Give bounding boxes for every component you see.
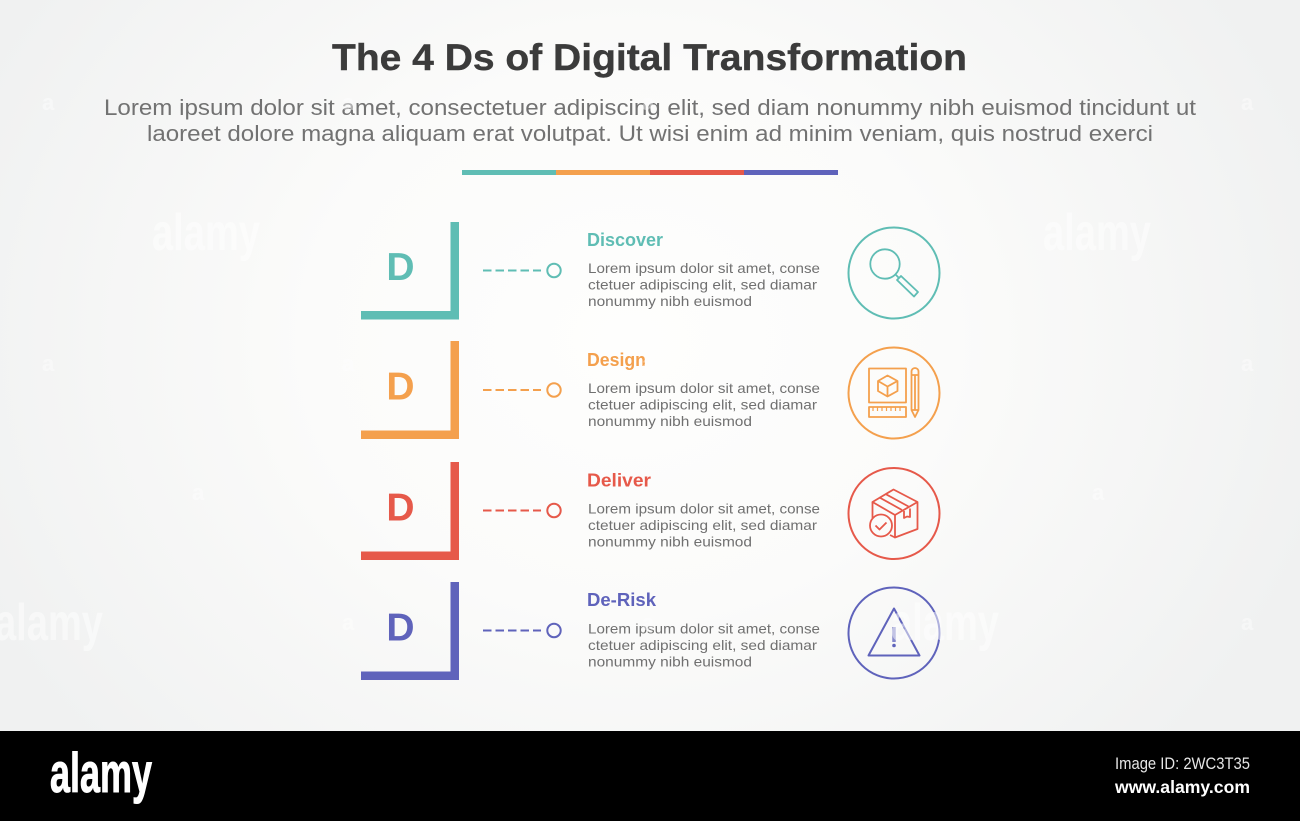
description: Discover [588,261,820,309]
icon: magnifying glass [848,228,940,318]
watermarks: a [642,90,655,115]
watermarks: alamy [891,594,999,652]
description: De-Risk [588,622,820,670]
description: Design: ctetuer adipiscing elit, sed diamar [588,398,818,412]
dashed connector: Discover [483,264,561,277]
corner bracket: Discover [361,222,459,320]
corner bracket: Deliver [361,462,459,560]
description: Deliver [588,502,820,550]
heading: De-Risk: De-Risk [587,590,657,610]
dashed connector: Deliver [483,504,561,517]
description: Design: nonummy nibh euismod [588,414,752,429]
watermarks: a [642,610,655,635]
dashed connector: De-Risk [483,624,561,637]
watermarks: a [42,90,55,115]
row 1: Discover [361,222,940,320]
description: Deliver: Lorem ipsum dolor sit amet, conse [588,502,820,516]
description: De-Risk: Lorem ipsum dolor sit amet, conse [588,622,820,636]
website: www.alamy.com [1114,777,1250,797]
intro text block [104,95,1196,146]
footer logo: alamy [50,741,152,804]
corner bracket: De-Risk [361,582,459,680]
heading: Design: Design [587,350,646,370]
title: The 4 Ds of Digital Transformation [332,37,967,78]
watermarks: alamy [1043,204,1151,262]
watermarks: a [642,351,655,376]
description: De-Risk: nonummy nibh euismod [588,654,752,670]
four colour divider bar [462,170,838,175]
watermarks: a [342,90,355,115]
footer bar [0,731,1300,821]
heading: Deliver: Deliver [587,470,651,490]
letter D: Discover: D [386,246,415,289]
icon: parcel with check mark [848,468,940,559]
description: Discover: nonummy nibh euismod [588,294,752,309]
watermarks: a [1241,351,1254,376]
watermarks: a [1092,480,1105,505]
watermarks: alamy [152,204,260,262]
description: Design [588,381,820,429]
icon: warning triangle [848,588,940,678]
intro text block: laoreet dolore magna aliquam erat volutpat. Ut wisi enim ad minim veniam, quis nostrud exerci [147,121,1153,146]
letter D: Design: D [386,366,415,408]
description: Deliver: ctetuer adipiscing elit, sed diamar [588,518,818,533]
row 3: Deliver [361,462,940,560]
corner bracket: Design [361,341,459,439]
watermarks: a [1241,90,1254,115]
description: Discover: Lorem ipsum dolor sit amet, conse [588,261,820,276]
intro text block: Lorem ipsum dolor sit amet, consectetuer adipiscing elit, sed diam nonummy nibh euismod tincidunt ut [104,95,1196,120]
letter D: De-Risk: D [386,606,415,650]
watermarks: a [342,610,355,635]
watermarks: a [42,351,55,376]
watermarks: a [342,351,355,376]
description: Discover: ctetuer adipiscing elit, sed diamar [588,278,818,292]
description: De-Risk: ctetuer adipiscing elit, sed diamar [588,638,818,653]
watermarks: a [1241,610,1254,635]
watermarks: a [192,480,205,505]
row 4: De-Risk [361,582,940,680]
row 2: Design [361,341,940,439]
image id: Image ID: 2WC3T35 [1115,754,1250,773]
heading: Discover: Discover [587,230,663,250]
watermarks [0,90,1254,652]
dashed connector: Design [483,383,561,397]
description: Deliver: nonummy nibh euismod [588,534,752,550]
description: Design: Lorem ipsum dolor sit amet, conse [588,381,820,396]
icon: design board, ruler and pencil [848,348,940,438]
letter D: Deliver: D [386,486,415,530]
